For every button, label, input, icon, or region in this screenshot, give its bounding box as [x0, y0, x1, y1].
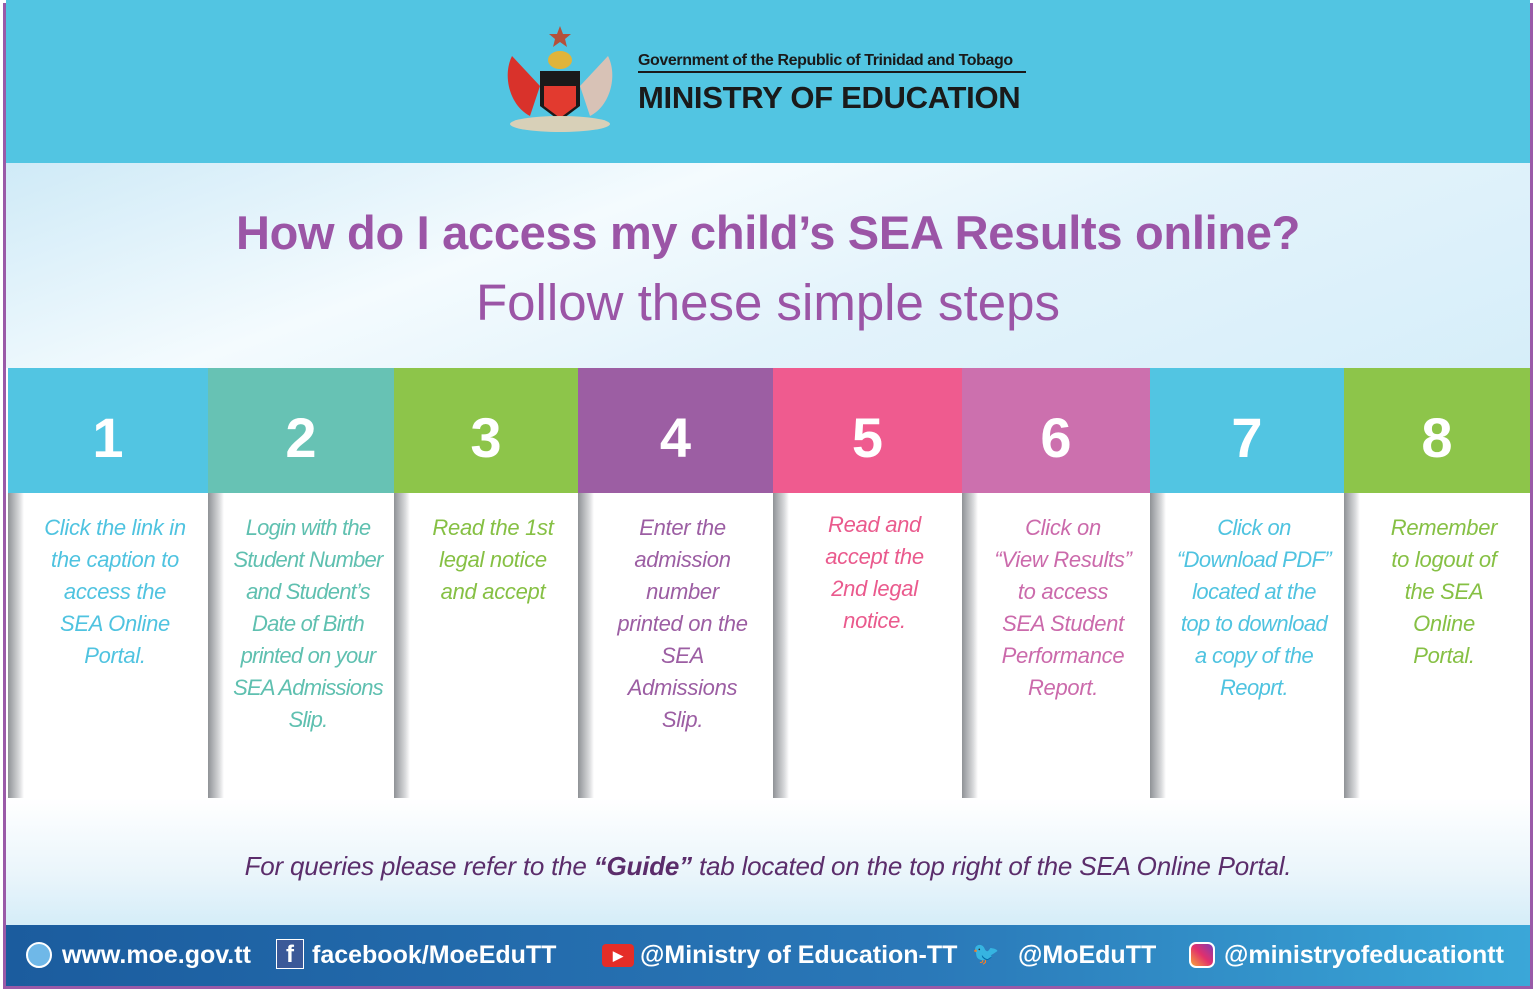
icon: facebook [276, 939, 304, 969]
step 4: Slip. [662, 707, 703, 732]
step 8: to logout of [1391, 547, 1497, 572]
step 2: Date of Birth [252, 611, 364, 636]
title: How do I access my child’s SEA Results online? [236, 206, 1300, 259]
icon: instagram [1189, 942, 1215, 968]
step 3 [394, 368, 578, 798]
step 4: SEA [661, 643, 704, 668]
step 7: Click on [1217, 515, 1291, 540]
step 5: Read and [828, 512, 921, 537]
icon: globe [26, 942, 52, 968]
step 5: notice. [843, 608, 906, 633]
icon: coat of arms [508, 26, 612, 132]
icon: youtube: ▶ [613, 948, 623, 963]
step 7: top to download [1181, 611, 1327, 636]
step 7: a copy of the [1195, 643, 1313, 668]
step 8: the SEA [1405, 579, 1483, 604]
step 8: Online [1413, 611, 1475, 636]
footer social bar [6, 925, 1530, 986]
footer social bar: @MoEduTT [1018, 941, 1156, 969]
step 3: Read the 1st [432, 515, 554, 540]
header text: government: Government of the Republic of Trinidad and Tobago [638, 52, 1013, 69]
step 5: 2nd legal [831, 576, 918, 601]
step 2: 2 [285, 406, 317, 469]
footer social bar: @ministryofeducationtt [1224, 941, 1504, 969]
step 6: Performance [1002, 643, 1124, 668]
step 3: and accept [441, 579, 545, 604]
step 6: “View Results” [994, 547, 1132, 572]
step 1: SEA Online [60, 611, 170, 636]
step 6: Report. [1028, 675, 1098, 700]
header text: ministry: MINISTRY OF EDUCATION [638, 80, 1020, 115]
step 5 [773, 368, 962, 798]
step 1: Portal. [84, 643, 146, 668]
step 5: 5 [852, 406, 883, 469]
step 7: Reoprt. [1220, 675, 1288, 700]
step 4: 4 [660, 406, 691, 469]
footer social bar: facebook/MoeEduTT [312, 941, 556, 969]
footer social bar: @Ministry of Education-TT [640, 941, 957, 969]
bottom band background [6, 798, 1530, 925]
step 8 [1344, 368, 1530, 798]
step 4: admission [634, 547, 731, 572]
step 7 [1150, 368, 1344, 798]
step 6: Click on [1025, 515, 1101, 540]
step 4: Enter the [639, 515, 726, 540]
step 2: and Student’s [246, 579, 370, 604]
step 2: Login with the [246, 515, 370, 540]
step 3: 3 [470, 406, 502, 469]
step 2 [208, 368, 394, 798]
step 5: accept the [825, 544, 924, 569]
step 6: 6 [1040, 406, 1072, 469]
step 8: Portal. [1413, 643, 1475, 668]
step 7: 7 [1231, 406, 1263, 469]
step 1: Click the link in [44, 515, 186, 540]
step 4 [578, 368, 773, 798]
queries note: For queries please refer to the “Guide” tab located on the top right of the SEA Online Portal. [245, 851, 1291, 881]
hero background [6, 163, 1530, 368]
footer social bar: www.moe.gov.tt [62, 941, 251, 969]
step 1 [8, 368, 208, 798]
step 1: access the [64, 579, 166, 604]
step 6: SEA Student [1002, 611, 1124, 636]
icon: twitter: 🐦 [972, 941, 999, 966]
step 2: Slip. [289, 707, 327, 732]
step 7: “Download PDF” [1177, 547, 1331, 572]
step 3: legal notice [439, 547, 547, 572]
step 1: the caption to [51, 547, 179, 572]
icon: youtube [602, 944, 634, 967]
step 8: Remember [1391, 515, 1497, 540]
step 2: printed on your [241, 643, 375, 668]
step 6 [962, 368, 1150, 798]
step 1: 1 [92, 406, 124, 469]
step 4: Admissions [628, 675, 737, 700]
step 2: Student Number [234, 547, 382, 572]
icon: facebook: f [286, 941, 294, 968]
step 2: SEA Admissions [233, 675, 383, 700]
step 4: number [646, 579, 719, 604]
step 7: located at the [1192, 579, 1316, 604]
step 4: printed on the [617, 611, 748, 636]
step 8: 8 [1421, 406, 1453, 469]
step 6: to access [1018, 579, 1108, 604]
header band [6, 0, 1530, 163]
subtitle: Follow these simple steps [476, 274, 1060, 331]
